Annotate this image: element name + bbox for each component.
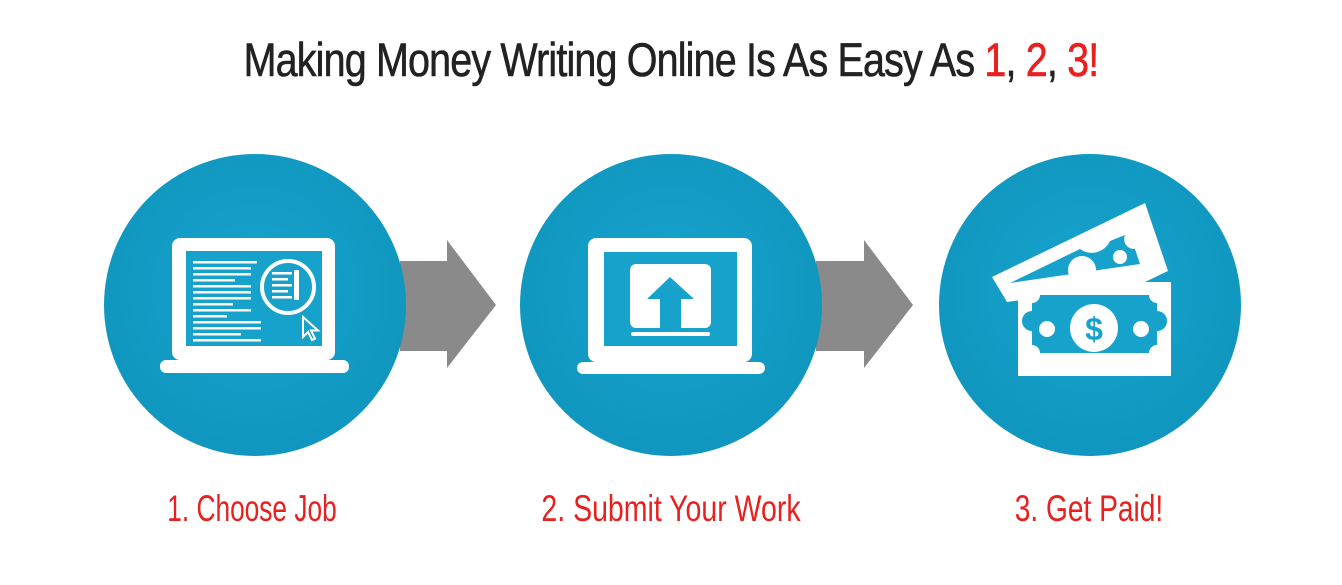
step 2 circle <box>520 154 822 456</box>
icon: money: $ <box>1085 311 1103 347</box>
step 3 circle <box>939 154 1241 456</box>
arrow 1 <box>400 240 496 368</box>
step 1 circle <box>104 154 406 456</box>
icon: laptop with search <box>160 238 349 373</box>
icon: money <box>992 203 1171 376</box>
icon: laptop with upload <box>577 238 765 374</box>
label 3: 3. Get Paid! <box>1015 488 1163 529</box>
label 1: 1. Choose Job <box>167 488 337 529</box>
label 2: 2. Submit Your Work <box>541 488 801 529</box>
arrow 2 <box>816 240 913 368</box>
title: Making Money Writing Online Is As Easy As 1, 2, 3! <box>244 33 1098 86</box>
